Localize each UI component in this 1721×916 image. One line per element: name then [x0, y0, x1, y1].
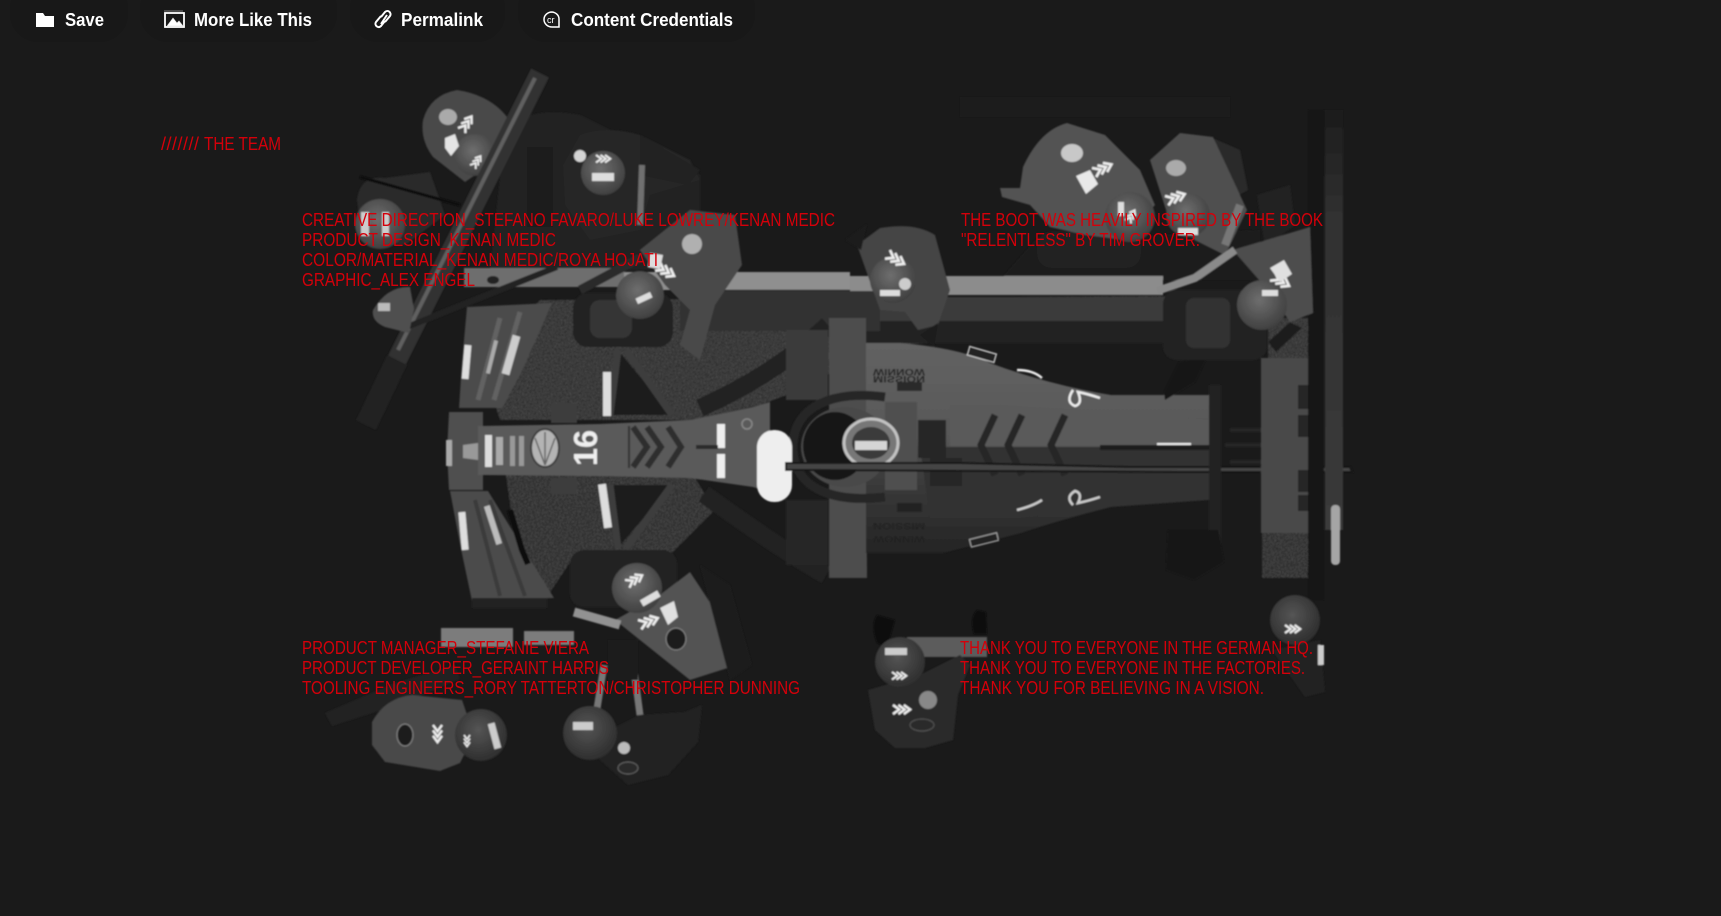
crew member lower right corner: [1270, 595, 1325, 697]
pit lane strip lower right: [907, 637, 987, 657]
section label: THE TEAM: [204, 134, 281, 154]
crew member top centre: [527, 130, 700, 240]
content credentials button: cr: [547, 15, 554, 25]
crew member lower right centre: [868, 610, 987, 748]
front wing lower: [450, 491, 554, 608]
credits bottom left: [302, 638, 800, 699]
pit lane strip: [464, 268, 1173, 343]
pit stop photo illustration: [325, 73, 1352, 785]
diagonal pole left: [366, 73, 557, 425]
content credentials button: Content Credentials: [571, 10, 733, 30]
rear body livery: WINNOW: [872, 534, 925, 544]
crew member top right: [1150, 133, 1248, 255]
crew member top left: [422, 90, 512, 182]
crew member lower centre: [563, 640, 702, 785]
front wing upper: [459, 303, 552, 408]
rear wing: [1261, 358, 1321, 533]
cockpit and halo: [793, 395, 917, 498]
credits bottom left: PRODUCT DEVELOPER_GERAINT HARRIS: [302, 658, 609, 679]
crew member left with screen: [355, 172, 460, 249]
rear body livery: WINNOW: [873, 367, 926, 377]
nose livery: [485, 419, 752, 478]
thank you note bottom right: [960, 638, 1313, 698]
thank you note bottom right: THANK YOU TO EVERYONE IN THE GERMAN HQ.: [960, 638, 1313, 658]
save button: [36, 10, 104, 30]
tyre lower left: [570, 550, 677, 607]
credits top left: CREATIVE DIRECTION_STEFANO FAVARO/LUKE LOWREY/KENAN MEDIC: [302, 210, 835, 231]
crew member with tyre top left: [580, 210, 742, 360]
crew member lower left: [325, 665, 507, 771]
thank you note bottom right: THANK YOU FOR BELIEVING IN A VISION.: [960, 678, 1264, 698]
front suspension: [551, 350, 672, 548]
car nose and front wing centre: [446, 402, 770, 492]
driver helmet: [844, 419, 898, 467]
credits top left: COLOR/MATERIAL_KENAN MEDIC/ROYA HOJATI: [302, 250, 658, 271]
credits top left: GRAPHIC_ALEX ENGEL: [302, 270, 475, 291]
inspiration note top right: "RELENTLESS" BY TIM GROVER.: [961, 230, 1200, 250]
pit lane strip lower: [441, 628, 574, 647]
rear body: [866, 343, 1209, 553]
tyre right: [1163, 290, 1267, 360]
section label: ///////: [161, 134, 199, 154]
credits bottom left: PRODUCT MANAGER_STEFANIE VIERA: [302, 638, 589, 659]
inspiration note top right: THE BOOT WAS HEAVILY INSPIRED BY THE BOOK: [961, 210, 1323, 230]
crew backpack right: [1257, 185, 1295, 247]
thank you note bottom right: THANK YOU TO EVERYONE IN THE FACTORIES.: [960, 658, 1305, 678]
credits top left: PRODUCT DESIGN_KENAN MEDIC: [302, 230, 556, 251]
crew member kneeling top right: [1000, 123, 1155, 268]
crew member centre: [845, 224, 950, 347]
save button: Save: [65, 10, 104, 30]
nose livery: 16: [567, 430, 604, 466]
pit gantry pole right: [1308, 110, 1343, 600]
credits top left: [302, 210, 835, 291]
asphalt: [480, 97, 1316, 600]
refuel rig hose: [786, 463, 1352, 472]
credits bottom left: TOOLING ENGINEERS_RORY TATTERTON/CHRISTOPHER DUNNING: [302, 678, 800, 699]
crew member with tyre lower: [574, 563, 752, 680]
section label: [161, 134, 281, 154]
inspiration note top right: [961, 210, 1323, 250]
more like this button: More Like This: [194, 10, 312, 30]
rear body livery: [872, 346, 1220, 547]
white cockpit oval: [757, 430, 792, 502]
sidepod inlets and floor bars: [700, 318, 867, 578]
permalink button: Permalink: [401, 10, 484, 30]
rear body livery: MISSION: [873, 521, 925, 531]
crew member with tyre right: [1157, 227, 1313, 352]
rear body livery: MISSION: [873, 374, 925, 384]
toolbar: [10, 0, 755, 42]
rear suspension and wheels: [1164, 357, 1315, 580]
tyre top left: [573, 293, 673, 347]
